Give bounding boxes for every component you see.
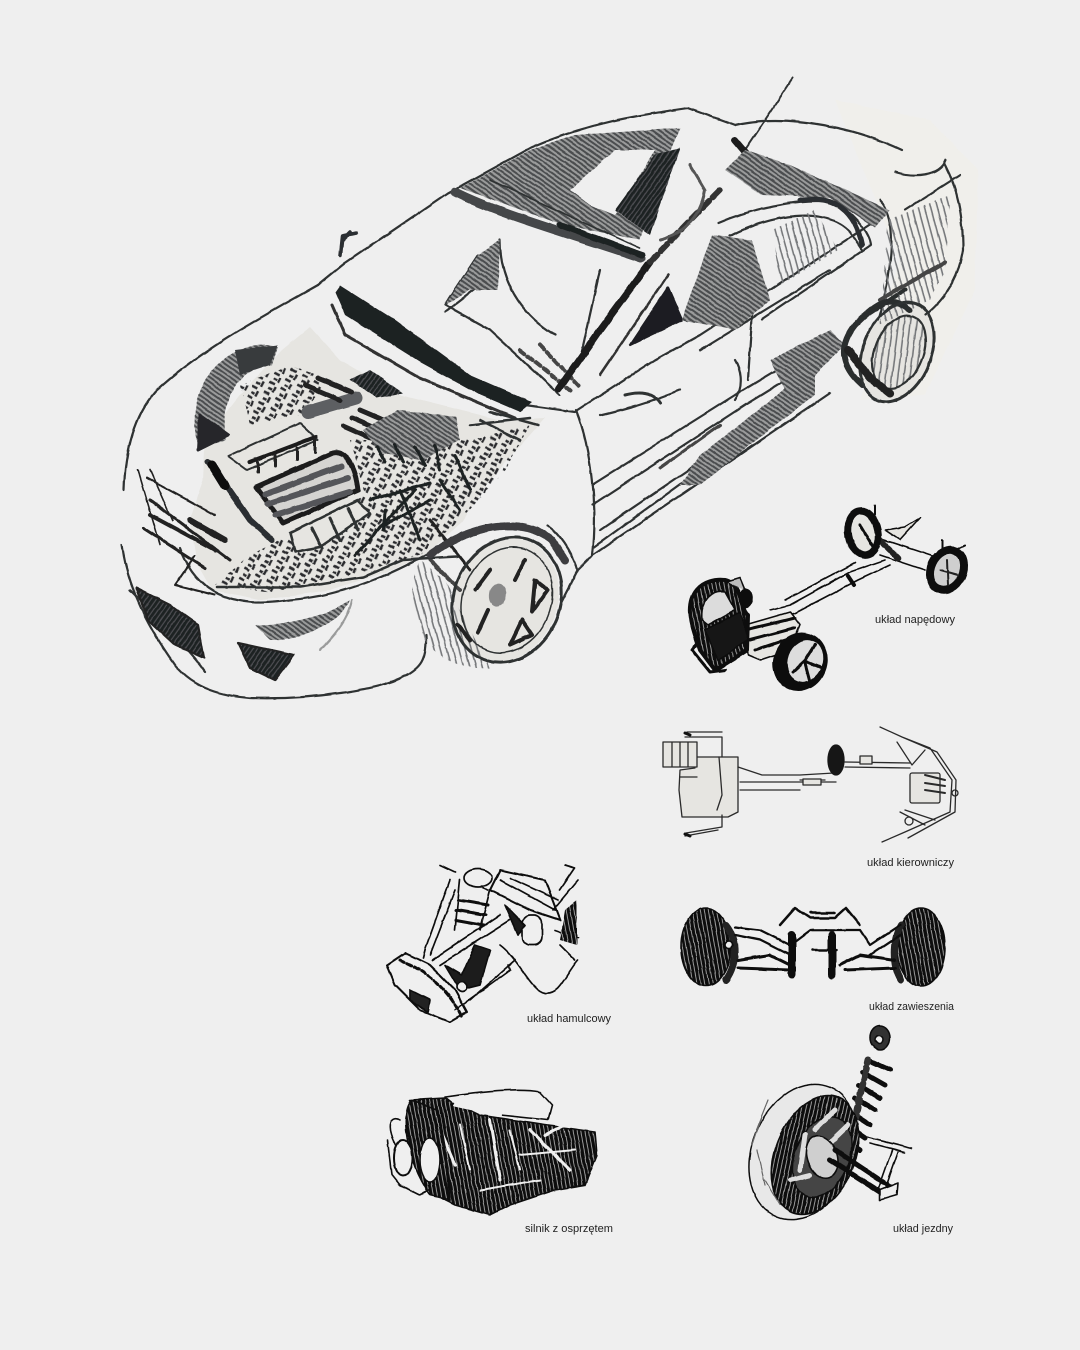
rear roof hatching (725, 150, 890, 228)
front frame (880, 727, 956, 842)
illustration: wheel and shock (729, 1026, 912, 1236)
tyre (729, 1068, 877, 1236)
antenna (745, 78, 793, 150)
mirror (340, 232, 356, 255)
fog lamp (238, 643, 294, 680)
brake line (500, 945, 578, 993)
engine dark mass (410, 1098, 597, 1215)
steering wheel (828, 745, 844, 775)
illustration: braking (387, 865, 578, 1022)
axle arm (868, 1137, 912, 1192)
suspension arms (423, 880, 515, 1010)
label: steering: układ kierowniczy (867, 857, 955, 869)
dark roof wedge (615, 148, 680, 235)
bumper gray highlights (255, 600, 350, 640)
lower bumper intake (136, 588, 204, 658)
gearbox block (679, 757, 738, 817)
body outline (122, 108, 963, 698)
dark triangle under windshield (350, 370, 403, 398)
hub details (445, 945, 490, 990)
panel tint behind rear of car (835, 100, 978, 400)
dark slats (305, 378, 388, 438)
rear wheel (844, 290, 948, 413)
label: braking: układ hamulcowy (527, 1013, 611, 1025)
brake disc (387, 953, 467, 1022)
strut and spring (440, 865, 490, 930)
A-pillar black (559, 262, 650, 389)
spokes (790, 1110, 848, 1180)
engine texture (215, 425, 530, 592)
antenna base (735, 140, 752, 160)
rear wheel beige fill (846, 289, 948, 411)
label: suspension: układ zawieszenia (869, 1001, 955, 1013)
rear left wheel (844, 509, 882, 557)
label: engine: silnik z osprzętem (525, 1223, 613, 1235)
engine linkage strokes (355, 445, 470, 555)
left tyre (681, 908, 731, 986)
upper cylinder (308, 398, 356, 412)
pulley and fan (406, 1100, 450, 1200)
illustration: engine (388, 1090, 597, 1215)
drive shaft (770, 560, 890, 618)
illustration: suspension (681, 908, 945, 986)
illustration: drivetrain (690, 505, 970, 698)
dampers (792, 935, 832, 975)
steering column (738, 767, 836, 790)
arms (735, 925, 900, 955)
top bar of windshield (455, 192, 641, 258)
rear right wheel (924, 544, 970, 596)
wheel arch front (195, 345, 330, 450)
engine block (690, 580, 748, 670)
illustration: cutaway car (122, 78, 978, 698)
label: running gear: układ jezdny (893, 1223, 953, 1235)
right link (845, 762, 910, 768)
front wheel (412, 521, 580, 679)
rear axle (878, 518, 945, 570)
windshield edge black band (335, 285, 532, 412)
B-pillar and side hatching (682, 235, 770, 330)
coil spring (842, 1060, 890, 1150)
front right wheel (766, 626, 834, 698)
radiator grille (138, 470, 230, 595)
illustration: steering (663, 727, 958, 842)
engine top cover (445, 1090, 552, 1120)
shock absorber top (870, 1026, 890, 1050)
highlights (440, 1105, 570, 1180)
seat and interior lines (445, 240, 600, 395)
roof light opening (570, 150, 655, 215)
roof hatching (460, 128, 680, 240)
master cylinder (522, 915, 542, 945)
front wheel beige fill (433, 522, 577, 678)
intake runners (470, 412, 538, 440)
hub (800, 1131, 844, 1183)
bellows (663, 742, 697, 767)
lower door hatching (680, 375, 815, 485)
transmission (745, 612, 800, 660)
engine cover (208, 423, 358, 540)
right tyre (897, 908, 945, 986)
label: drivetrain: układ napędowy (875, 614, 955, 626)
gray blob on engine (363, 410, 460, 460)
engine bay beige fill (190, 327, 545, 600)
